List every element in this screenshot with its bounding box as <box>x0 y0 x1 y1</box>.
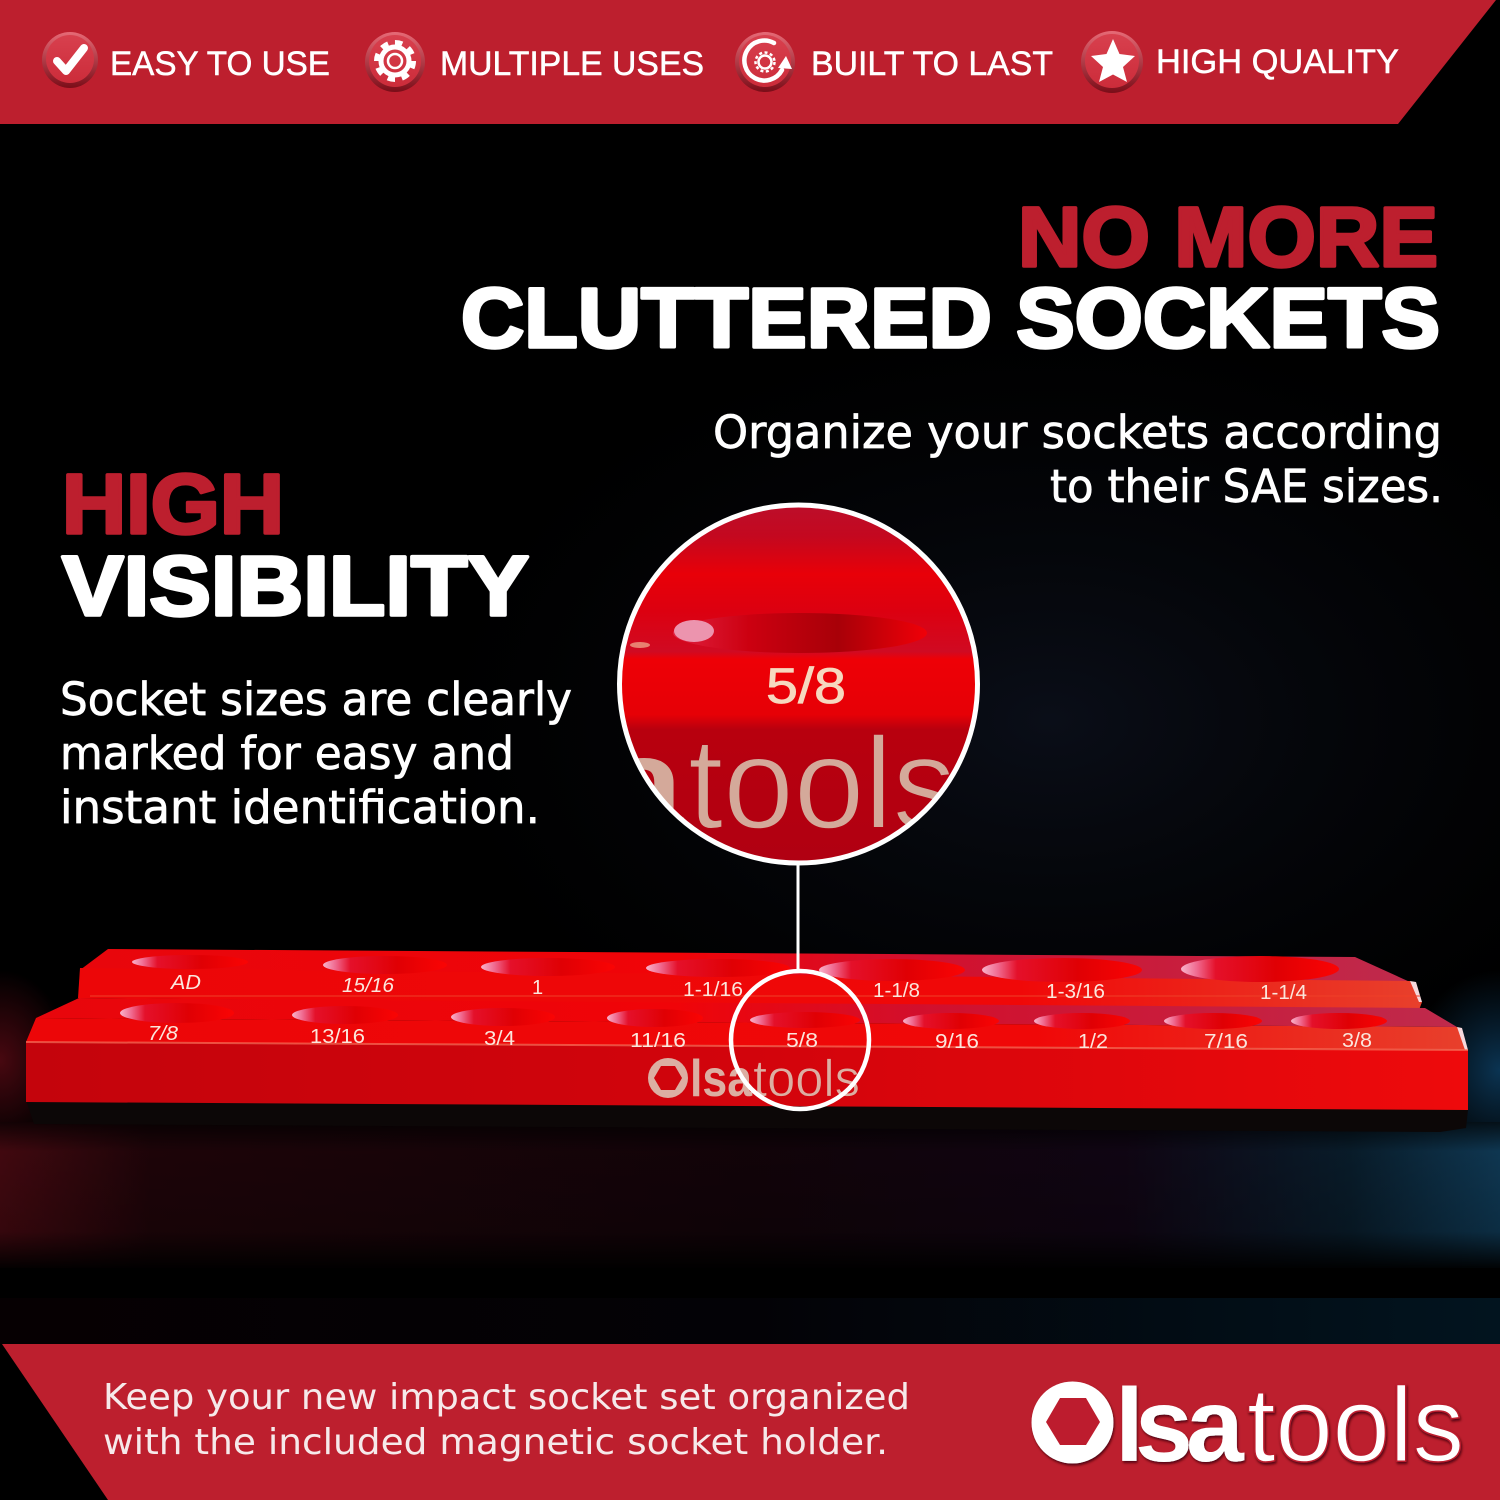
text block: organize sockets: to their SAE sizes. <box>1050 460 1443 513</box>
tray base <box>26 1100 1468 1132</box>
connector line <box>796 864 800 971</box>
heading: no more cluttered sockets <box>461 190 1440 365</box>
magnifier circle: a <box>605 710 685 856</box>
icon: check mark <box>42 32 98 88</box>
benefit: easy to use: EASY TO USE <box>110 45 330 83</box>
front rail: 7/16 <box>1204 1031 1248 1053</box>
magnifier circle <box>605 500 985 870</box>
front rail: 3/4 <box>484 1028 515 1050</box>
text block: socket sizes marked: Socket sizes are clearly <box>60 673 572 726</box>
front rail: 1/2 <box>1078 1031 1108 1053</box>
magnifier circle: tools <box>688 710 956 856</box>
logo: Olsatools: lsa <box>1115 1368 1245 1484</box>
tagline: with the included magnetic socket holder. <box>103 1422 888 1463</box>
heading: no more cluttered sockets: CLUTTERED SOCKETS <box>461 271 1440 365</box>
bottom banner <box>2 1344 1500 1500</box>
heading: no more cluttered sockets: NO MORE <box>1018 190 1438 284</box>
front rail: 5/8 <box>786 1030 818 1052</box>
icon: gear <box>365 32 425 92</box>
magnifier circle: 5/8 <box>766 658 846 714</box>
text block: socket sizes marked: instant identification. <box>60 781 540 834</box>
back rail: AD <box>170 972 201 994</box>
logo: Olsatools: O <box>1036 1365 1112 1483</box>
text block: socket sizes marked: marked for easy and <box>60 727 514 780</box>
tray logo <box>648 1050 860 1108</box>
benefit: multiple uses: MULTIPLE USES <box>440 45 704 83</box>
text block: organize sockets <box>713 406 1443 513</box>
tray logo: lsa <box>690 1050 753 1108</box>
logo: Olsatools: tools <box>1247 1366 1464 1484</box>
back rail: 1 <box>532 977 543 999</box>
benefit: high quality <box>1081 31 1399 93</box>
heading: high visibility: HIGH <box>62 457 284 551</box>
tagline: Keep your new impact socket set organized <box>103 1377 910 1418</box>
front rail: 3/8 <box>1342 1030 1372 1052</box>
heading: high visibility: VISIBILITY <box>62 539 529 633</box>
front rail <box>26 998 1468 1110</box>
logo: Olsatools <box>1032 1365 1464 1484</box>
benefit: multiple uses <box>365 32 704 92</box>
back rail: 1-1/8 <box>873 980 920 1002</box>
icon: star <box>1081 31 1143 93</box>
benefit: built to last: BUILT TO LAST <box>811 45 1053 83</box>
benefit: high quality: HIGH QUALITY <box>1156 43 1399 81</box>
small magnifier ring <box>731 971 869 1109</box>
text block: organize sockets: Organize your sockets according <box>713 406 1442 459</box>
back rail: 1-1/16 <box>683 979 743 1001</box>
tagline <box>103 1377 910 1463</box>
text block: socket sizes marked <box>60 673 572 834</box>
benefit: easy to use <box>42 32 330 88</box>
back rail: 15/16 <box>342 975 395 997</box>
back rail <box>78 949 1422 1010</box>
top banner <box>0 0 1496 124</box>
front rail: 13/16 <box>310 1026 365 1048</box>
front rail: 9/16 <box>935 1031 979 1053</box>
front rail: 11/16 <box>630 1030 686 1052</box>
heading: high visibility <box>62 457 529 633</box>
back rail: 1-3/16 <box>1046 981 1105 1003</box>
tray logo: tools <box>753 1050 860 1108</box>
socket tray <box>26 949 1468 1132</box>
back rail: 1-1/4 <box>1260 982 1307 1004</box>
icon: gear in circular arrow <box>735 32 795 92</box>
tray logo: O <box>650 1050 688 1108</box>
benefit: built to last <box>735 32 1053 92</box>
front rail: 7/8 <box>148 1023 178 1045</box>
